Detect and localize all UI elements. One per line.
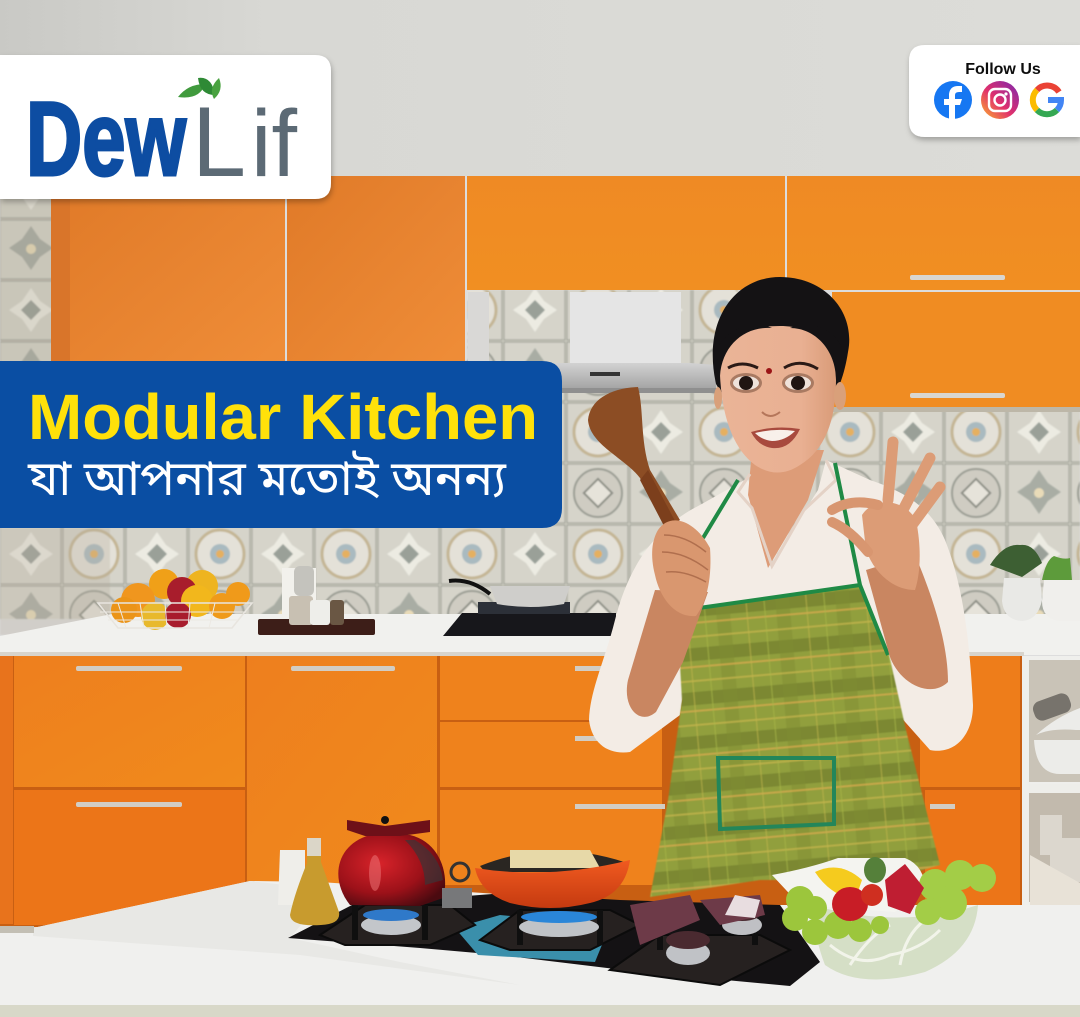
logo card <box>0 55 331 199</box>
salad bowl <box>772 857 996 980</box>
logo wordmark dew: Dew <box>26 81 186 198</box>
bengali tagline: যা আপনার মতোই অনন্য <box>27 450 507 515</box>
main foreground counter <box>0 881 1080 1017</box>
cooker hood <box>468 292 718 393</box>
logo leaves <box>178 78 221 99</box>
lower cabinets <box>0 655 1024 927</box>
face <box>720 326 836 472</box>
icon: facebook <box>934 81 972 119</box>
orange pan with food <box>442 850 630 908</box>
logo wordmark lif: L <box>192 86 246 197</box>
fruit basket <box>98 569 252 630</box>
hair <box>713 277 849 394</box>
hob and frying pan on wall counter <box>443 581 616 636</box>
cabinet handles <box>910 275 1005 398</box>
tray with shakers <box>258 566 375 635</box>
nose <box>762 412 780 416</box>
left forearm <box>627 590 708 717</box>
icon: instagram <box>981 81 1019 119</box>
ceiling wall <box>0 0 1080 176</box>
woman with apron <box>588 277 973 897</box>
right forearm <box>866 555 948 689</box>
shirt <box>589 460 973 753</box>
apron trim and straps <box>678 463 888 655</box>
oil bottle and jug <box>278 838 339 925</box>
upper cabinets <box>51 176 1080 412</box>
bindi <box>766 368 772 374</box>
lower cabinet handles <box>76 666 955 809</box>
pan supports and burners <box>320 895 790 985</box>
collar <box>738 460 836 566</box>
apron pocket <box>718 758 834 829</box>
headline banner <box>0 361 562 528</box>
right hand ok gesture <box>832 442 940 590</box>
eyes <box>730 373 814 393</box>
apron <box>650 585 940 897</box>
logo wordmark lif <box>192 86 298 197</box>
eyebrows <box>728 363 818 369</box>
neck <box>748 450 824 568</box>
wooden spatula <box>588 387 702 572</box>
red kettle <box>338 816 445 906</box>
ears <box>714 382 846 410</box>
hair fringe <box>716 324 846 380</box>
smile <box>751 428 800 448</box>
left hand fist <box>652 520 710 616</box>
tiled backsplash <box>0 190 1080 635</box>
icon: google <box>1033 86 1061 114</box>
logo wordmark lif: if <box>251 91 298 197</box>
wall counter <box>0 614 1080 656</box>
gas hob <box>288 893 820 986</box>
follow us card <box>909 45 1080 137</box>
headline: Modular Kitchen <box>28 381 538 453</box>
potted plants <box>990 545 1080 621</box>
follow us label: Follow Us <box>965 61 1041 78</box>
open shelf unit with bowls <box>1022 656 1080 910</box>
